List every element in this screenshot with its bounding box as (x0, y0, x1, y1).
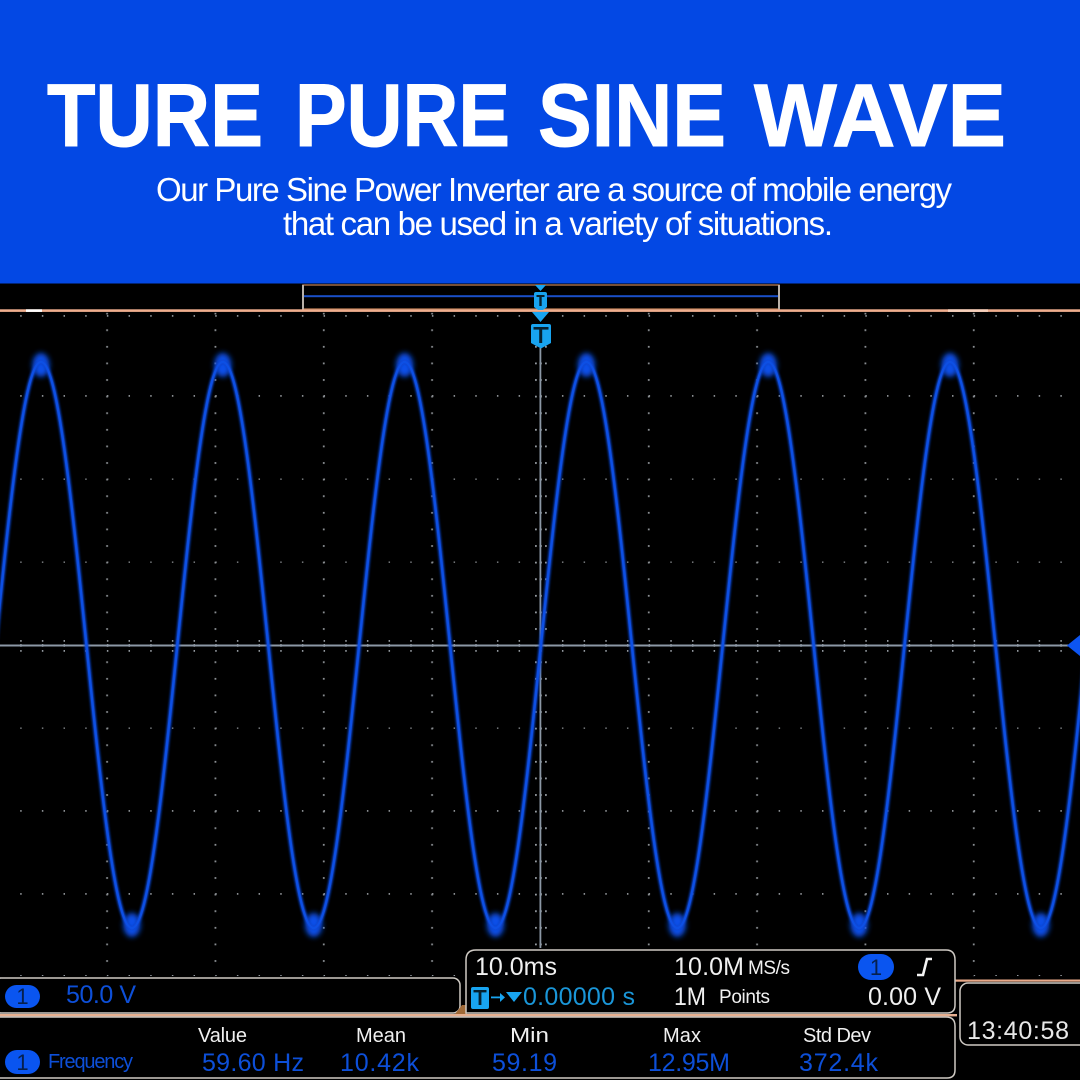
measurement values: 372.4k (799, 1049, 878, 1077)
sample rate (674, 953, 790, 981)
subtitle: that can be used in a variety of situations. (283, 205, 833, 242)
trigger channel badge (858, 954, 894, 980)
trigger level: 0.00 V (868, 983, 941, 1011)
panel: timebase and trigger (466, 950, 955, 1013)
sample rate: MS/s (748, 958, 790, 979)
sine waveform (0, 353, 1080, 937)
measurement headings: Mean (356, 1025, 406, 1047)
measurement channel badge: 1 (16, 1050, 29, 1075)
icon: trigger position (471, 987, 522, 1009)
measurement headings: Value (198, 1025, 247, 1047)
time per division: 10.0ms (475, 953, 557, 981)
icon: rising edge (917, 959, 932, 975)
trigger delay: 0.00000 s (523, 983, 635, 1011)
title (47, 65, 1006, 165)
top record-length bar (302, 285, 780, 310)
title: WAVE (754, 65, 1006, 165)
subtitle: Our Pure Sine Power Inverter are a source of mobile energy (156, 171, 952, 208)
subtitle (156, 171, 952, 242)
measurement values: 10.42k (340, 1049, 420, 1077)
channel badge: 1 (16, 984, 29, 1009)
header banner (0, 0, 1080, 284)
panel: vertical scale (0, 978, 467, 1014)
trigger channel badge: 1 (870, 955, 882, 980)
icon: trigger markers (531, 285, 551, 348)
record length: 1M (674, 983, 706, 1011)
measurement channel badge (5, 1050, 40, 1075)
panel: measurements (0, 1017, 955, 1078)
oscilloscope screen (0, 284, 1080, 1080)
measurement values (202, 1049, 878, 1077)
title: TURE (47, 65, 263, 165)
measurement headings: Min (510, 1025, 549, 1047)
measurement values: 59.19 (492, 1049, 557, 1077)
record length (674, 983, 770, 1011)
channel badge (5, 984, 40, 1009)
measurement headings (198, 1025, 871, 1047)
record length: Points (719, 987, 770, 1008)
icon: ground level marker (1067, 635, 1080, 656)
measurement headings: Max (663, 1025, 701, 1047)
bottom orange rule (0, 1014, 957, 1016)
right orange rule (955, 980, 1080, 982)
measurement values: 59.60 Hz (202, 1049, 304, 1077)
title: SINE (538, 65, 726, 165)
top orange rule (0, 309, 1080, 312)
sample rate: 10.0M (674, 953, 744, 981)
time: 13:40:58 (967, 1017, 1069, 1045)
frequency label: Frequency (48, 1051, 133, 1073)
title: PURE (295, 65, 510, 165)
measurement headings: Std Dev (803, 1025, 871, 1047)
measurement values: 12.95M (648, 1049, 730, 1077)
volts per division: 50.0 V (66, 981, 136, 1009)
measurement grid (0, 312, 1080, 977)
panel: clock (960, 983, 1080, 1045)
